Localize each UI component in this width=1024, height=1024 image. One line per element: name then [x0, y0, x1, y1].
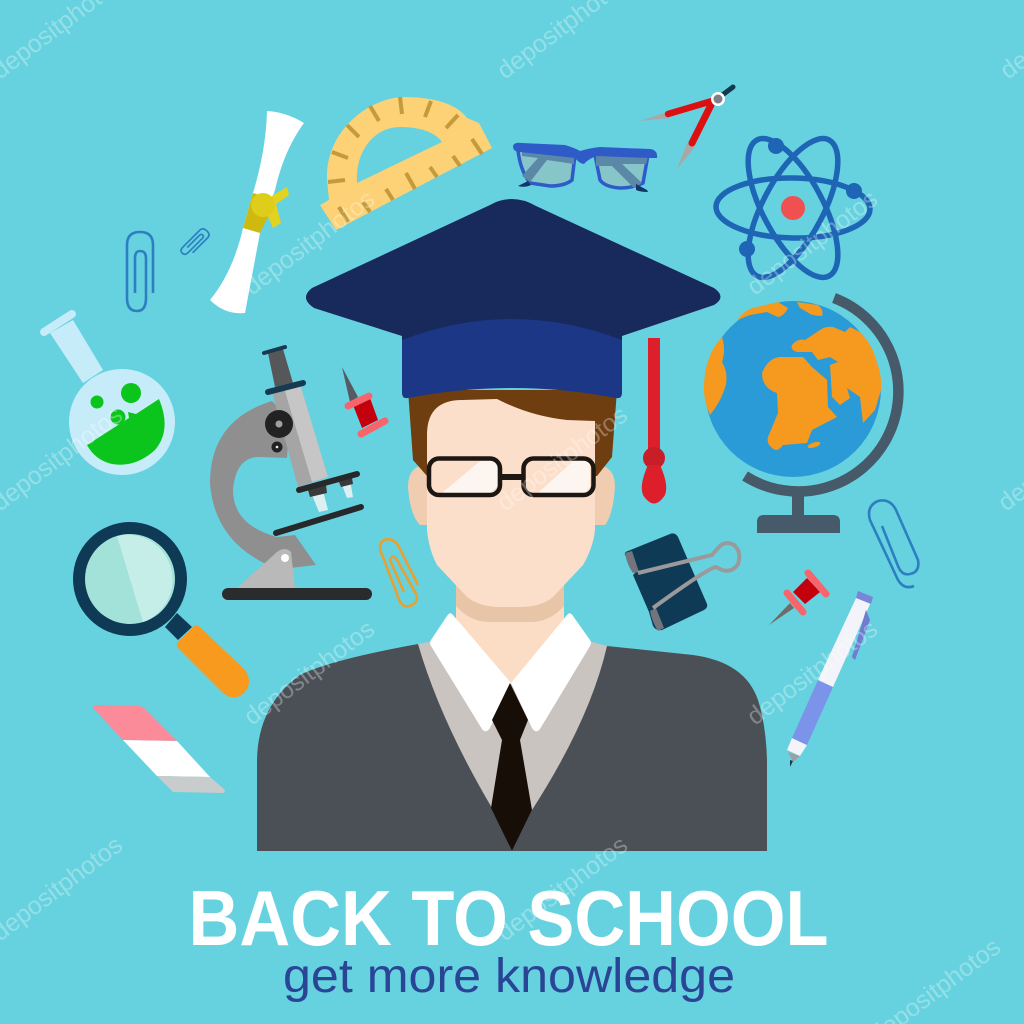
- eyeglasses: [429, 458, 594, 495]
- ears: [408, 465, 615, 525]
- lapels: [418, 640, 607, 851]
- icon: flask: [44, 314, 175, 475]
- hair: [408, 390, 617, 476]
- icon: protractor: [320, 97, 492, 230]
- neck shadow: [456, 580, 564, 622]
- icon: orange paper clip: [380, 539, 418, 606]
- suit jacket: [257, 644, 767, 851]
- neck: [456, 570, 564, 684]
- icon: large paper clip left: [127, 232, 153, 311]
- watermarks: depositphotos: [492, 401, 633, 517]
- watermarks: depositphotos: [239, 185, 380, 301]
- watermarks: depositphotos: [239, 615, 380, 731]
- icon: atom: [715, 126, 871, 290]
- icon: push pin right: [769, 573, 826, 625]
- cap board: [306, 199, 720, 350]
- watermarks: depositphotos: [742, 185, 883, 301]
- face: [427, 399, 595, 607]
- character: graduate: [257, 199, 767, 851]
- icon: red push pin: [342, 367, 385, 434]
- icon: microscope: [210, 347, 372, 600]
- icon: glasses (blue): [513, 143, 657, 192]
- title: BACK TO SCHOOL: [188, 874, 828, 962]
- watermarks: depositphotos: [742, 615, 883, 731]
- icon: eraser: [93, 705, 225, 793]
- icon: magnifying glass: [73, 522, 249, 698]
- icon: drawing compass: [640, 87, 733, 169]
- icon: blue paper clip right: [869, 500, 918, 587]
- subtitle: get more knowledge: [283, 950, 735, 1003]
- icon: binder clip: [625, 533, 739, 631]
- shirt collar: [430, 613, 591, 731]
- necktie: [491, 683, 532, 851]
- watermarks: depositphotos: [492, 831, 633, 947]
- icon: globe: [704, 298, 898, 533]
- tassel: [642, 338, 666, 504]
- cap band: [402, 319, 622, 398]
- icon: small paper clip: [180, 227, 211, 258]
- icon: pen: [787, 591, 873, 767]
- icon: diploma scroll: [210, 111, 304, 313]
